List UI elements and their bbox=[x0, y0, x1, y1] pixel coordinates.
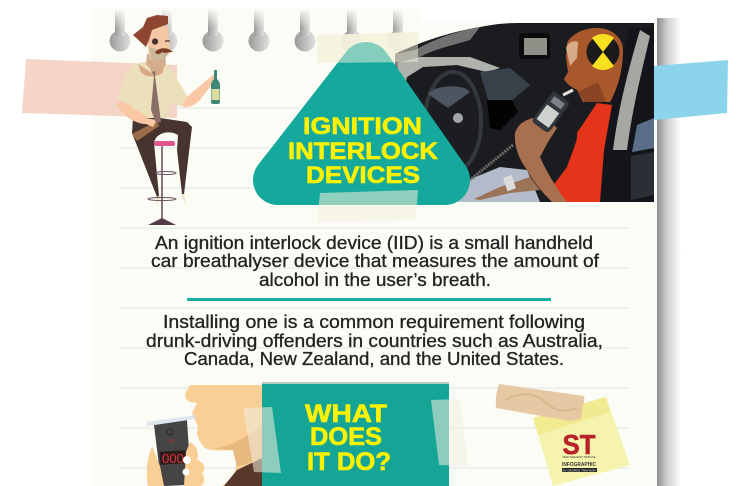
tape: left of teal panel bbox=[243, 407, 281, 473]
heading: IT DO? bbox=[307, 448, 391, 476]
divider bbox=[187, 298, 551, 301]
binder holes bbox=[91, 8, 657, 52]
photo: crash-test dummy in car using device bbox=[395, 23, 654, 202]
door pillar bbox=[600, 28, 654, 202]
lower arm bbox=[474, 177, 540, 200]
device bbox=[531, 91, 570, 134]
tie bbox=[150, 68, 161, 123]
interior panels bbox=[480, 68, 530, 102]
panel: paper sheet bbox=[91, 10, 681, 486]
stool bbox=[148, 141, 176, 225]
text: where devices are required: Installing one is a common requirement following bbox=[163, 312, 585, 332]
text: IID definition: alcohol in the user’s breath. bbox=[259, 270, 491, 290]
beard bbox=[149, 47, 168, 61]
mustache bbox=[155, 48, 173, 54]
brown bottle bbox=[132, 121, 159, 141]
tape: blue right bbox=[654, 60, 728, 120]
breathalyser: 000 bbox=[162, 451, 184, 466]
illustration: person blowing into breathalyser bbox=[147, 385, 263, 486]
text: IID definition bbox=[151, 233, 600, 290]
logo: BY GEORGE TRAYNOR bbox=[562, 468, 596, 472]
steering wheel bbox=[425, 72, 481, 172]
legs bbox=[132, 118, 192, 197]
lap bbox=[458, 167, 540, 202]
logo: INFOGRAPHIC bbox=[562, 462, 596, 468]
title: IGNITION bbox=[303, 113, 422, 140]
dummy head bbox=[564, 28, 623, 102]
tape: pink left bbox=[22, 59, 177, 118]
red shirt bbox=[552, 103, 612, 202]
brown tape bbox=[496, 384, 584, 421]
curly cable bbox=[470, 145, 513, 180]
title bbox=[288, 113, 439, 189]
logo: NEW SARAWAK TRIBUNE bbox=[562, 455, 596, 459]
hair bbox=[133, 15, 168, 47]
text: where devices are required bbox=[146, 312, 603, 369]
heading bbox=[305, 400, 391, 476]
shirt bbox=[118, 62, 188, 118]
text: where devices are required: drunk-driving offenders in countries such as Australia, bbox=[146, 331, 603, 351]
text: IID definition: An ignition interlock device (IID) is a small handheld bbox=[155, 233, 593, 253]
panel: what does it do bbox=[262, 382, 449, 486]
head bbox=[148, 26, 170, 61]
neck bbox=[146, 52, 166, 72]
illustration: drunk man on bar stool bbox=[117, 15, 220, 225]
eyes bbox=[153, 39, 170, 44]
title: INTERLOCK bbox=[288, 138, 439, 165]
tape: bottom of banner bbox=[317, 190, 418, 222]
sticky note with logo bbox=[496, 384, 630, 486]
tape: right of teal panel bbox=[431, 399, 468, 466]
text: IID definition: car breathalyser device that measures the amount of bbox=[151, 251, 600, 271]
neck shade bbox=[205, 425, 262, 467]
logo: ST bbox=[562, 429, 596, 460]
white tube bbox=[563, 90, 573, 95]
heading: DOES bbox=[310, 423, 382, 451]
dashboard bbox=[395, 27, 500, 93]
logo bbox=[562, 429, 597, 472]
left arm bbox=[117, 102, 147, 124]
tape: behind banner bbox=[317, 32, 418, 63]
title: DEVICES bbox=[306, 162, 420, 189]
shirt collar bbox=[224, 458, 262, 486]
text: where devices are required: Canada, New Zealand, and the United States. bbox=[184, 349, 564, 369]
arm bbox=[515, 118, 567, 202]
forearm with bottle bbox=[183, 75, 216, 107]
banner: teal rounded triangle with title bbox=[278, 67, 445, 189]
face bbox=[185, 385, 263, 486]
tape: top of banner bbox=[317, 32, 418, 63]
hand bbox=[147, 442, 204, 486]
icon: crash target bbox=[586, 34, 620, 70]
heading: WHAT bbox=[305, 400, 387, 428]
